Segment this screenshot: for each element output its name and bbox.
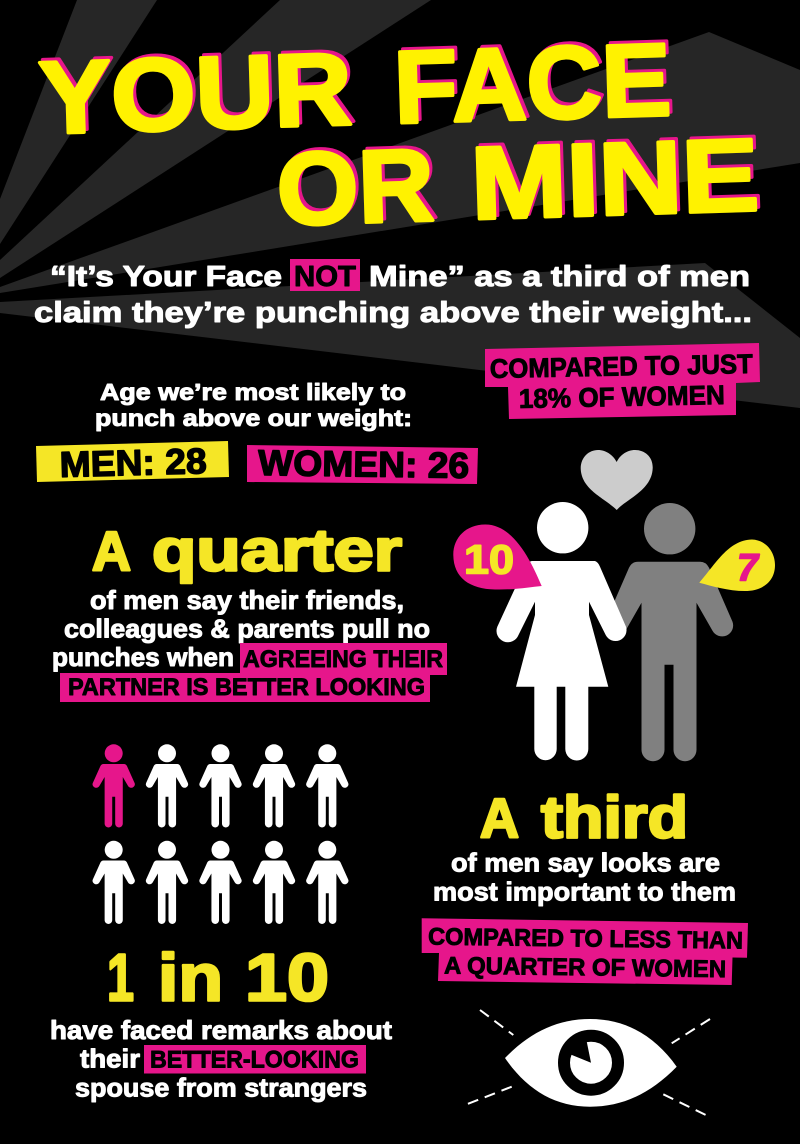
score bubble: 10 xyxy=(453,524,542,590)
subtitle: Mine” as a third of men xyxy=(369,261,750,293)
title: Your Face or Mine: OR xyxy=(275,127,436,247)
stat: a quarter: PARTNER IS BETTER LOOKING xyxy=(68,674,425,701)
icon: heart xyxy=(581,450,653,510)
title: Your Face or Mine: YOUR xyxy=(40,28,357,152)
stat: a quarter: of men say their friends, xyxy=(90,585,404,615)
stat: a quarter: colleagues & parents pull no xyxy=(64,614,430,644)
title: Your Face or Mine: FACE xyxy=(395,19,676,142)
stat: 1 in 10: their xyxy=(80,1044,140,1074)
stat: 1 in 10: 1 xyxy=(107,940,134,1016)
icon: woman xyxy=(497,502,627,761)
title: Your Face or Mine: MINE xyxy=(472,114,764,238)
badge: men 28: MEN: 28 xyxy=(59,440,207,485)
stat: a third: A xyxy=(480,786,519,850)
title: Your Face or Mine: OR xyxy=(278,124,439,244)
title: Your Face or Mine: YOUR xyxy=(37,31,354,155)
stat: a quarter: punches when xyxy=(52,642,234,672)
stat: 1 in 10: BETTER-LOOKING xyxy=(150,1046,359,1074)
score bubble: 10: 10 xyxy=(464,536,514,582)
stat: a third: third xyxy=(541,784,688,850)
icon: couple with heart xyxy=(453,450,775,761)
icon: eye xyxy=(465,1010,710,1117)
stat: a quarter: A xyxy=(92,520,131,582)
text: age most likely: punch above our weight: xyxy=(95,405,412,431)
stat: 1 in 10: in xyxy=(158,940,223,1016)
text: age most likely xyxy=(95,379,412,431)
stat: 1 in 10: have faced remarks about xyxy=(50,1015,392,1045)
stat: a quarter: quarter xyxy=(152,518,402,584)
title: Your Face or Mine xyxy=(37,19,764,247)
score bubble: 7 xyxy=(699,540,775,591)
score bubble: 7: 7 xyxy=(737,548,760,590)
stat: a third: most important to them xyxy=(433,876,736,906)
background sunburst rays xyxy=(0,0,800,408)
stat: 1 in 10: spouse from strangers xyxy=(75,1072,367,1102)
title: Your Face or Mine: MINE xyxy=(469,117,761,241)
stat: a quarter: AGREEING THEIR xyxy=(243,646,443,673)
person highlighted xyxy=(93,744,135,827)
callout: compared to just 18% of women: 18% OF WOMEN xyxy=(519,380,725,414)
subtitle: NOT xyxy=(294,261,357,293)
text: age most likely: Age we’re most likely to xyxy=(100,379,406,405)
pictogram: 1 in 10 people xyxy=(93,744,348,924)
callout: compared to just 18% of women xyxy=(485,343,760,419)
stat: 1 in 10: 10 xyxy=(245,940,329,1016)
stat: a third xyxy=(433,784,736,906)
stat: a third: of men say looks are xyxy=(451,848,720,878)
callout: compared to less than a quarter of women xyxy=(422,918,748,985)
callout: compared to just 18% of women: COMPARED TO JUST xyxy=(490,349,754,384)
title: Your Face or Mine: FACE xyxy=(392,22,673,145)
subtitle: “It’s Your Face xyxy=(50,261,282,293)
subtitle xyxy=(34,259,752,329)
badge: women 26: WOMEN: 26 xyxy=(258,442,469,486)
icon: man xyxy=(605,503,733,761)
stat: 1 in 10 xyxy=(50,940,392,1102)
stat: a quarter xyxy=(52,518,447,702)
subtitle: claim they’re punching above their weight... xyxy=(34,297,752,329)
callout: compared to less than a quarter of women: COMPARED TO LESS THAN xyxy=(428,924,743,955)
callout: compared to less than a quarter of women: A QUARTER OF WOMEN xyxy=(444,953,726,983)
